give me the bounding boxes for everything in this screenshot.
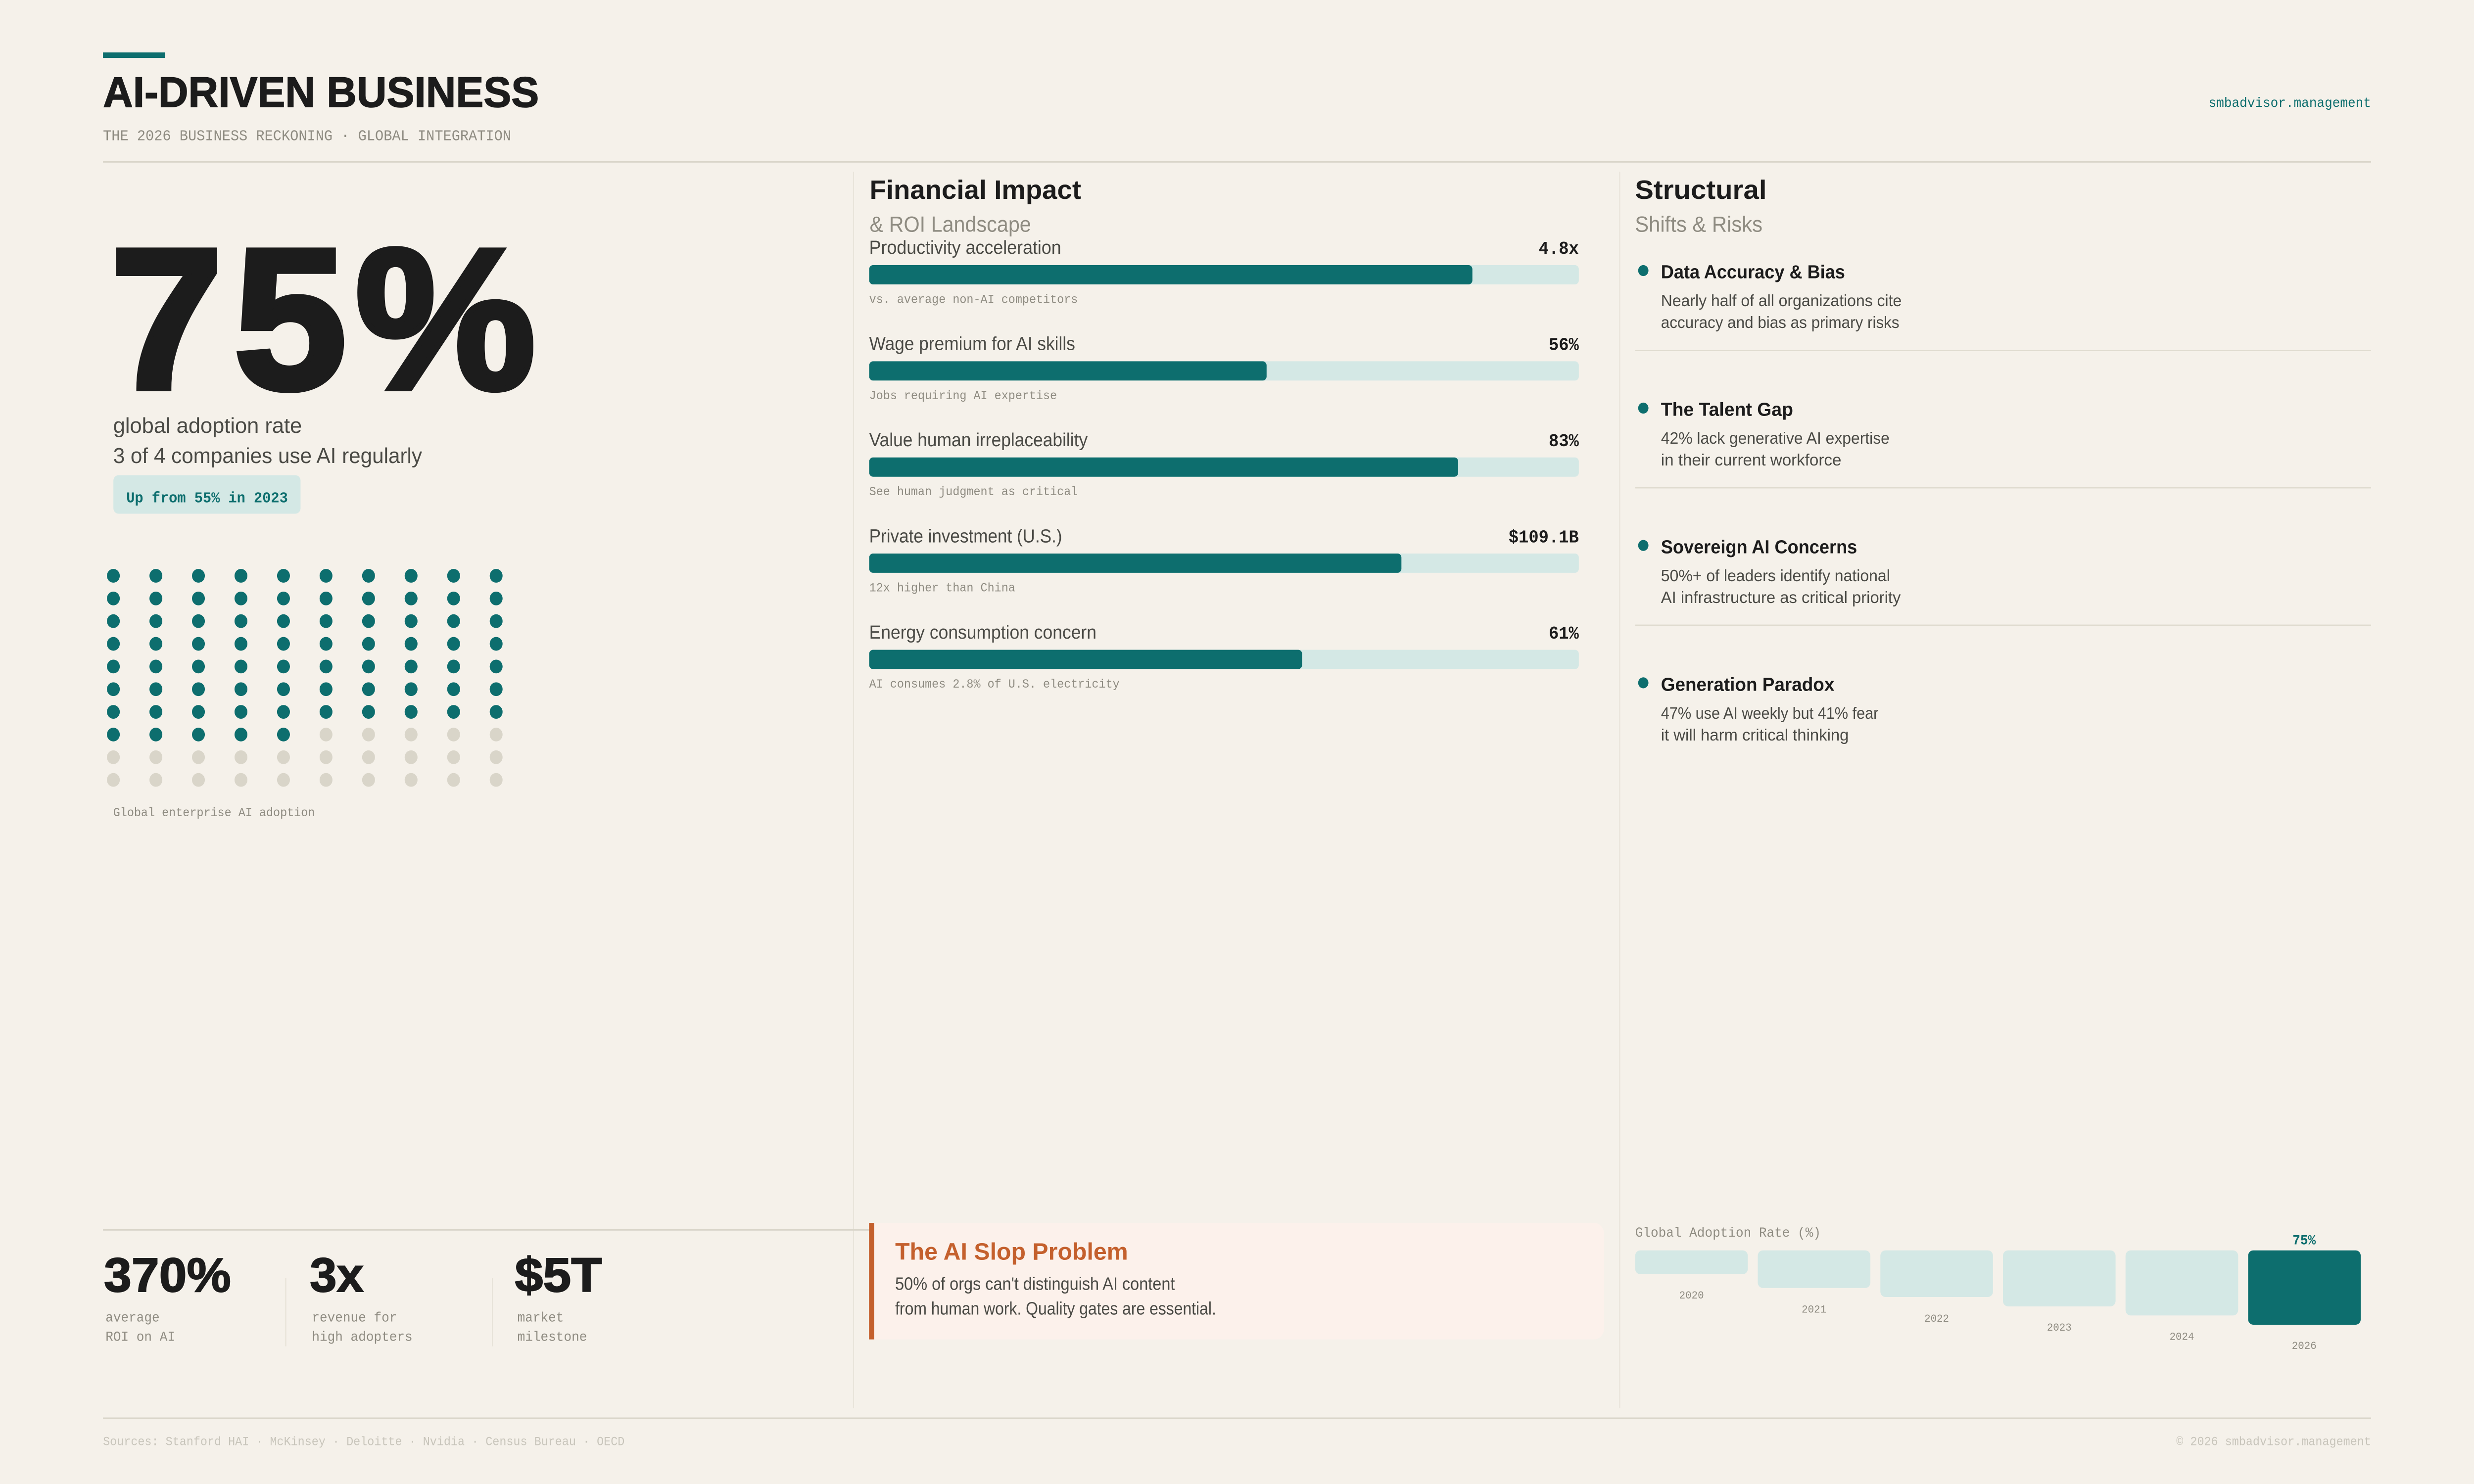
- bar: wage premium: 56%: [1549, 335, 1579, 356]
- bar: productivity acceleration: vs. average non-AI competitors: [869, 293, 1078, 307]
- bar 2022: 2022: [1924, 1313, 1949, 1325]
- bar: human irreplaceability: See human judgment as critical: [869, 486, 1078, 499]
- website link: smbadvisor.management: [2209, 96, 2371, 111]
- hero description: [113, 414, 423, 468]
- title: AI-DRIVEN BUSINESS: [103, 69, 539, 116]
- bar: energy consumption: 61%: [1549, 624, 1579, 644]
- item: data accuracy and bias: accuracy and bias as primary risks: [1661, 313, 1900, 331]
- header: [103, 52, 2371, 145]
- bar: productivity acceleration: 4.8x: [1539, 239, 1579, 259]
- metric: 3x revenue: 3x: [310, 1248, 364, 1302]
- bar: wage premium: Jobs requiring AI expertise: [869, 389, 1057, 403]
- metric: 3x revenue: [310, 1248, 413, 1345]
- item: generation paradox: it will harm critical thinking: [1661, 726, 1849, 744]
- badge: up from 55%: Up from 55% in 2023: [126, 490, 288, 507]
- bar 2020: [1635, 1251, 1748, 1302]
- item: talent gap: in their current workforce: [1661, 451, 1841, 469]
- hero description: 3 of 4 companies use AI regularly: [113, 444, 423, 468]
- footer copyright: © 2026 smbadvisor.management: [2176, 1436, 2371, 1449]
- hero stat 75%: 75%: [110, 207, 536, 431]
- metric: 3x revenue: high adopters: [312, 1330, 413, 1345]
- item: data accuracy and bias: Nearly half of all organizations cite: [1661, 291, 1902, 310]
- bar 2023: [2003, 1251, 2116, 1334]
- subtitle: THE 2026 BUSINESS RECKONING · GLOBAL INTEGRATION: [103, 128, 511, 145]
- bar: private investment: Private investment (U.S.): [869, 525, 1062, 547]
- callout: AI slop problem: from human work. Quality gates are essential.: [895, 1299, 1216, 1319]
- chart title: Global Adoption Rate (%): [1635, 1226, 1821, 1241]
- item: sovereign AI concerns: AI infrastructure as critical priority: [1661, 588, 1901, 606]
- item: generation paradox: Generation Paradox: [1661, 674, 1835, 695]
- bar: human irreplaceability: 83%: [1549, 431, 1579, 452]
- badge: up from 55%: [113, 475, 300, 513]
- callout: AI slop problem: [869, 1223, 1604, 1340]
- bar: private investment: $109.1B: [1509, 527, 1579, 548]
- metric: 370% ROI: ROI on AI: [105, 1330, 175, 1345]
- item: sovereign AI concerns: Sovereign AI Concerns: [1661, 536, 1857, 557]
- panel: key metrics: [104, 1248, 602, 1346]
- item: talent gap: The Talent Gap: [1661, 399, 1793, 420]
- item: talent gap: 42% lack generative AI expertise: [1661, 429, 1890, 447]
- bar 2026 highlighted: [2248, 1234, 2361, 1352]
- bar: productivity acceleration: Productivity acceleration: [869, 237, 1061, 258]
- callout: AI slop problem: The AI Slop Problem: [895, 1238, 1128, 1265]
- panel: adoption hero: [107, 207, 536, 820]
- metric: 370% ROI: 370%: [104, 1248, 231, 1302]
- metric: $5T milestone: milestone: [518, 1330, 587, 1345]
- item: sovereign AI concerns: 50%+ of leaders identify national: [1661, 566, 1890, 585]
- item: data accuracy and bias: Data Accuracy & Bias: [1661, 261, 1845, 282]
- bar: energy consumption: AI consumes 2.8% of U.S. electricity: [869, 678, 1120, 692]
- item: generation paradox: 47% use AI weekly but 41% fear: [1661, 704, 1879, 722]
- item: data accuracy and bias: [1638, 261, 1902, 331]
- panel: structural shifts: [1635, 176, 2371, 744]
- bar: productivity acceleration: [869, 237, 1579, 307]
- dot matrix: 75 of 100: [107, 569, 503, 787]
- structural heading: Structural: [1635, 176, 1766, 205]
- bar: energy consumption: Energy consumption concern: [869, 622, 1096, 643]
- metric: 370% ROI: [104, 1248, 231, 1345]
- bar: energy consumption: [869, 622, 1579, 692]
- bar: human irreplaceability: Value human irreplaceability: [869, 429, 1088, 450]
- financial subheading: & ROI Landscape: [870, 212, 1031, 237]
- bar: private investment: [869, 525, 1579, 596]
- financial heading: Financial Impact: [870, 176, 1081, 205]
- hero description: global adoption rate: [113, 414, 302, 438]
- bar 2022: [1880, 1251, 1993, 1325]
- dot matrix caption: Global enterprise AI adoption: [113, 806, 315, 820]
- metric: $5T milestone: $5T: [515, 1248, 602, 1302]
- bar: wage premium: [869, 333, 1579, 403]
- bar 2021: [1758, 1251, 1870, 1316]
- bar 2026 highlighted: 75%: [2292, 1234, 2316, 1249]
- item: talent gap: [1638, 399, 1890, 469]
- metric: 370% ROI: average: [105, 1311, 160, 1326]
- bar 2024: [2126, 1251, 2238, 1344]
- bar 2020: 2020: [1679, 1290, 1704, 1302]
- metric: 3x revenue: revenue for: [312, 1311, 397, 1326]
- bar 2024: 2024: [2170, 1331, 2194, 1344]
- bar 2026 highlighted: 2026: [2292, 1340, 2317, 1352]
- item: sovereign AI concerns: [1638, 536, 1901, 606]
- bar 2021: 2021: [1802, 1304, 1826, 1316]
- item: generation paradox: [1638, 674, 1879, 744]
- bar: wage premium: Wage premium for AI skills: [869, 333, 1075, 354]
- metric: $5T milestone: market: [518, 1311, 564, 1326]
- metric: $5T milestone: [515, 1248, 602, 1345]
- bar: human irreplaceability: [869, 429, 1579, 499]
- panel: financial impact: [869, 176, 1579, 692]
- bar 2023: 2023: [2047, 1322, 2072, 1334]
- chart: global adoption rate: [1635, 1226, 2361, 1352]
- structural subheading: Shifts & Risks: [1635, 212, 1762, 237]
- footer sources: Sources: Stanford HAI · McKinsey · Deloitte · Nvidia · Census Bureau · OECD: [103, 1436, 624, 1449]
- callout: AI slop problem: 50% of orgs can't distinguish AI content: [895, 1274, 1175, 1294]
- bar: private investment: 12x higher than China: [869, 582, 1015, 596]
- header accent bar: [103, 52, 165, 58]
